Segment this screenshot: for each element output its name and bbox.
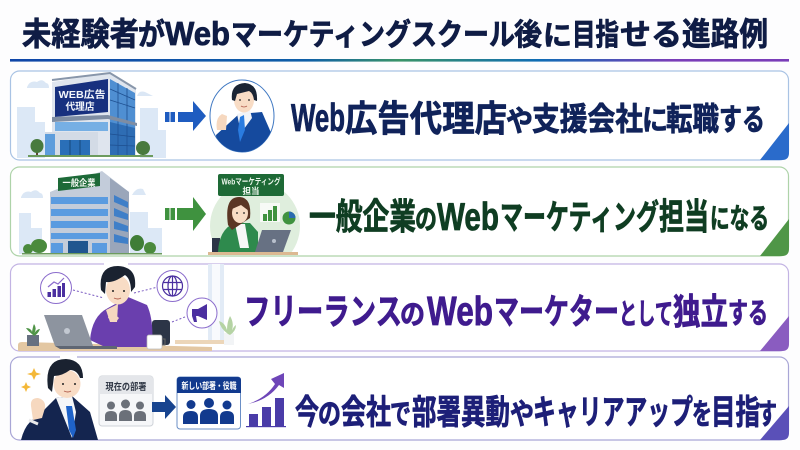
illustration: woman marketer: Webマーケティング <box>222 176 281 186</box>
box: new department <box>177 377 241 429</box>
headline 4: キャリアアップ <box>533 394 693 432</box>
headline 3: する <box>728 298 768 330</box>
headline 4: を <box>692 399 712 431</box>
title <box>22 15 768 52</box>
headline 1: する <box>719 104 765 137</box>
headline 1: 支援会社 <box>532 101 643 137</box>
corner accent blue <box>760 123 789 160</box>
headline 4: 部署異動 <box>412 394 510 432</box>
headline 2: になる <box>710 203 769 234</box>
headline 3: の <box>400 299 425 330</box>
illustration: woman marketer <box>208 174 300 255</box>
title: に <box>543 20 572 51</box>
box: current department <box>99 376 153 426</box>
headline 1: に <box>642 105 668 137</box>
headline 4: で <box>390 399 411 431</box>
headline 1: や <box>506 105 533 138</box>
headline 3: Web <box>427 288 493 334</box>
illustration: company building: 一般企業 <box>62 177 96 188</box>
illustration: woman marketer: 担当 <box>242 186 260 196</box>
title: Web <box>165 15 230 52</box>
title: マーケティングスクール <box>231 19 515 52</box>
corner accent purple <box>760 316 789 351</box>
headline 3: フリーランス <box>244 291 402 332</box>
illustration: promoted employee <box>21 355 98 440</box>
illustration: company building <box>19 171 162 254</box>
corner accent indigo <box>760 406 789 440</box>
illustration: agency building <box>17 73 166 158</box>
box: current department: 現在の部署 <box>106 381 147 393</box>
title: が <box>138 18 165 52</box>
headline 2: マーケティング <box>500 199 659 237</box>
headline 3: マーケター <box>494 293 619 332</box>
headline 4: 会社 <box>341 394 391 432</box>
headline 4: 目指 <box>711 394 760 432</box>
headline 2: 担当 <box>659 196 709 237</box>
title: 進路例 <box>682 16 768 52</box>
title: 目指 <box>572 19 619 52</box>
title rule <box>10 59 789 62</box>
illustration: agency building: WEB広告 <box>58 88 106 101</box>
arrow: green <box>165 197 206 231</box>
headline 4: の <box>318 399 341 431</box>
arrow: blue <box>165 101 206 131</box>
icon: growth chart <box>246 373 286 427</box>
headline 2 <box>309 196 769 239</box>
box: new department: 新しい部署・役職 <box>182 380 236 391</box>
panel: web agency <box>10 71 789 160</box>
headline 2: の <box>415 204 437 235</box>
headline 4: す <box>758 399 777 431</box>
headline 2: Web <box>437 196 499 239</box>
panel: in-house marketer <box>10 166 790 257</box>
illustration: agency building: 代理店 <box>66 101 94 113</box>
illustration: businessman circle <box>210 80 274 155</box>
headline 4: や <box>510 398 534 431</box>
headline 3 <box>244 288 768 334</box>
panel: freelance <box>10 262 789 351</box>
arrow: navy <box>152 395 176 419</box>
headline 3: として <box>619 299 673 331</box>
headline 1: Web <box>291 97 345 140</box>
title: 後 <box>514 19 542 52</box>
title: 未経験者 <box>22 16 139 52</box>
headline 2: 一般企業 <box>309 196 416 237</box>
headline 4: 今 <box>295 394 319 432</box>
headline 1 <box>291 97 765 140</box>
corner accent green <box>760 219 789 256</box>
illustration: freelancer at desk <box>18 262 236 351</box>
headline 3: 独立 <box>673 291 728 332</box>
panel: career up <box>10 355 789 440</box>
title: せる <box>620 19 682 52</box>
headline 1: 転職 <box>666 101 719 137</box>
headline 4 <box>295 394 777 432</box>
headline 1: 広告代理店 <box>345 98 507 139</box>
